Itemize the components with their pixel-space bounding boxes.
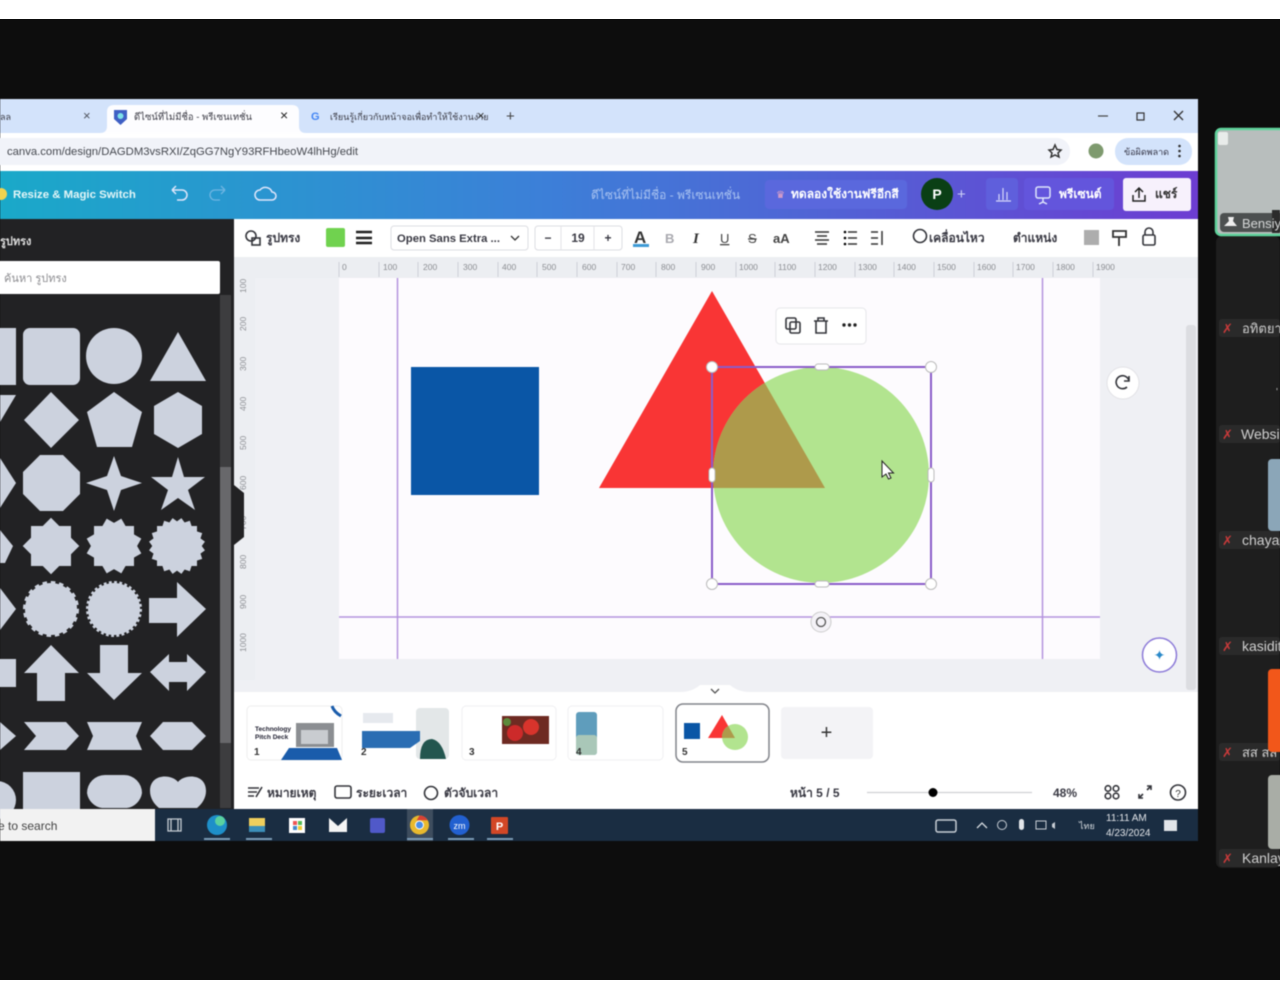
thumbnail 2: 2 [361, 747, 367, 758]
vertical ruler: 900 [238, 595, 248, 609]
mouse cursor [882, 461, 894, 479]
editor toolbar: I [692, 231, 700, 247]
editor toolbar: ตำแหน่ง [1013, 231, 1057, 245]
selection frame [706, 362, 936, 590]
shapes side panel: ค้นหา รูปทรง [4, 273, 67, 285]
tab bar: × [280, 107, 288, 123]
participant labels: ✗ [1222, 745, 1233, 760]
horizontal ruler: 1600 [977, 262, 996, 272]
canva header: แชร์ [1155, 187, 1178, 201]
thumbnail 1 [247, 706, 342, 760]
thumbnail 2 [354, 706, 449, 760]
canva header: ♛ [776, 190, 785, 201]
horizontal ruler: 500 [542, 262, 556, 272]
thumbnail 1: Pitch Deck [255, 734, 289, 741]
editor toolbar: Open Sans Extra ... [397, 233, 500, 245]
editor toolbar [234, 219, 1198, 257]
system tray: ไทย [1078, 821, 1095, 831]
horizontal ruler: 900 [701, 262, 715, 272]
tab bar: G [311, 111, 320, 123]
bottom status bar: หน้า 5 / 5 [790, 786, 840, 800]
participant labels: ✗ [1222, 533, 1233, 548]
participant labels [1219, 319, 1280, 867]
bottom status bar [234, 776, 1198, 809]
participant labels: ✗ [1222, 639, 1233, 654]
tab bar: × [83, 108, 91, 123]
taskbar icons [204, 809, 513, 841]
horizontal ruler: 1900 [1096, 262, 1115, 272]
system tray: 4/23/2024 [1106, 828, 1151, 839]
participant avatar: orange [1268, 669, 1280, 752]
vertical ruler: 1000 [238, 633, 248, 652]
bottom status bar: หมายเหตุ [267, 786, 317, 801]
shapes side panel: รูปทรง [0, 235, 31, 249]
canva header: + [957, 186, 966, 203]
vertical ruler: 400 [238, 397, 248, 411]
participant labels: ✗ [1222, 321, 1233, 336]
editor toolbar: + [604, 231, 612, 245]
add page button [781, 707, 873, 759]
tab bar: ดีไซน์ที่ไม่มีชื่อ - พรีเซนเทชั่น [134, 110, 253, 123]
bottom status bar: ระยะเวลา [356, 786, 407, 800]
tab bar: × [477, 108, 485, 123]
horizontal ruler: 1800 [1056, 262, 1075, 272]
refresh button [1107, 367, 1139, 399]
editor toolbar: S [748, 231, 757, 246]
editor toolbar: 19 [571, 231, 585, 245]
panel collapse handle [234, 485, 244, 545]
editor toolbar: aA [773, 231, 790, 246]
participant labels: สส สส [1242, 745, 1277, 760]
horizontal ruler: 0 [342, 262, 347, 272]
green circle [713, 367, 929, 583]
tab bar: เรียนรู้เกี่ยวกับหน้าจอเพื่อทำให้ใช้งานง่าย [330, 110, 489, 123]
active speaker tile: Bensiy [1242, 216, 1280, 231]
rotate handle [811, 612, 831, 632]
taskbar icons: P [496, 821, 503, 833]
horizontal ruler [234, 257, 1198, 278]
address bar: canva.com/design/DAGDM3vsRXI/ZqGG7NgY93RFHbeoW4lhHg/edit [7, 146, 359, 158]
participant avatar: landscape [1268, 775, 1280, 849]
participant avatar: blue photo [1268, 459, 1280, 531]
participant labels: Websi [1241, 426, 1280, 442]
magic button: ✦ [1154, 647, 1166, 663]
horizontal ruler: 400 [502, 262, 516, 272]
canva header: Resize & Magic Switch [13, 189, 136, 201]
horizontal ruler: 100 [383, 262, 397, 272]
system tray [936, 813, 1177, 839]
vertical ruler: 500 [238, 436, 248, 450]
participant labels: ✗ [1222, 427, 1233, 442]
canva header: ดีไซน์ที่ไม่มีชื่อ - พรีเซนเทชั่น [591, 186, 740, 202]
editor toolbar: A [634, 228, 646, 247]
thumbnail 4: 4 [576, 747, 582, 758]
blue square [411, 367, 539, 495]
horizontal ruler: 1200 [818, 262, 837, 272]
system tray: 11:11 AM [1106, 813, 1147, 824]
editor toolbar: B [665, 231, 674, 246]
canva header [0, 171, 1198, 219]
thumbnail 1: 1 [254, 747, 260, 758]
thumbnail 5 selected [676, 704, 769, 762]
thumbnail 5 selected: 5 [682, 747, 688, 758]
browser window [0, 99, 1198, 841]
canva header: P [932, 186, 942, 202]
editor toolbar: U [720, 231, 729, 246]
design page [339, 278, 1100, 659]
vertical ruler: 700 [238, 516, 248, 530]
horizontal ruler: 1700 [1016, 262, 1035, 272]
tab bar [0, 99, 1198, 133]
windows taskbar [0, 809, 1198, 841]
vertical ruler [234, 278, 255, 680]
overlap area [713, 382, 826, 488]
horizontal ruler: 800 [661, 262, 675, 272]
taskbar icons: zm [454, 821, 466, 831]
tab bar: ลล [0, 112, 11, 122]
horizontal ruler: 600 [582, 262, 596, 272]
zoom participants sidebar [1216, 129, 1280, 868]
horizontal ruler: 200 [423, 262, 437, 272]
shapes side panel [0, 219, 234, 819]
horizontal ruler: 1000 [739, 262, 758, 272]
address bar [0, 133, 1198, 171]
editor toolbar: รูปทรง [266, 231, 300, 246]
vertical ruler: 300 [238, 357, 248, 371]
page thumbnails strip [246, 685, 872, 764]
thumbnail 1: Technology [255, 726, 291, 733]
canva header: ทดลองใช้งานฟรีอีกสี [791, 186, 899, 201]
canva header: พรีเซนต์ [1059, 187, 1102, 201]
shape grid [0, 328, 206, 819]
thumbnail 3 [462, 706, 556, 760]
vertical ruler: 200 [238, 317, 248, 331]
tab bar: + [506, 108, 515, 125]
add page button: + [821, 722, 832, 744]
bottom status bar: ? [1175, 789, 1181, 800]
red triangle [599, 291, 825, 488]
thumbnail 4 [568, 706, 663, 760]
participant labels: ' [1276, 387, 1278, 398]
editor toolbar: เคลื่อนไหว [929, 229, 985, 245]
horizontal ruler: 1400 [897, 262, 916, 272]
horizontal ruler: 300 [463, 262, 477, 272]
floating element toolbar [776, 308, 866, 344]
horizontal ruler: 1300 [858, 262, 877, 272]
bottom status bar: ตัวจับเวลา [444, 786, 498, 800]
horizontal ruler: 700 [621, 262, 635, 272]
horizontal ruler: 1500 [937, 262, 956, 272]
horizontal ruler: 1100 [778, 262, 797, 272]
vertical ruler: 100 [238, 279, 248, 293]
editor toolbar: − [544, 231, 552, 245]
address bar: ข้อผิดพลาด [1124, 147, 1169, 157]
canvas scrollbar [1186, 325, 1196, 690]
vertical ruler: 800 [238, 555, 248, 569]
canvas workspace [234, 278, 1198, 692]
magic button [1142, 638, 1176, 672]
participant labels: ✗ [1222, 851, 1233, 866]
thumbnail 3: 3 [469, 747, 475, 758]
bottom status bar: 48% [1053, 786, 1077, 800]
vertical ruler: 600 [238, 476, 248, 490]
active speaker tile [1216, 129, 1280, 235]
